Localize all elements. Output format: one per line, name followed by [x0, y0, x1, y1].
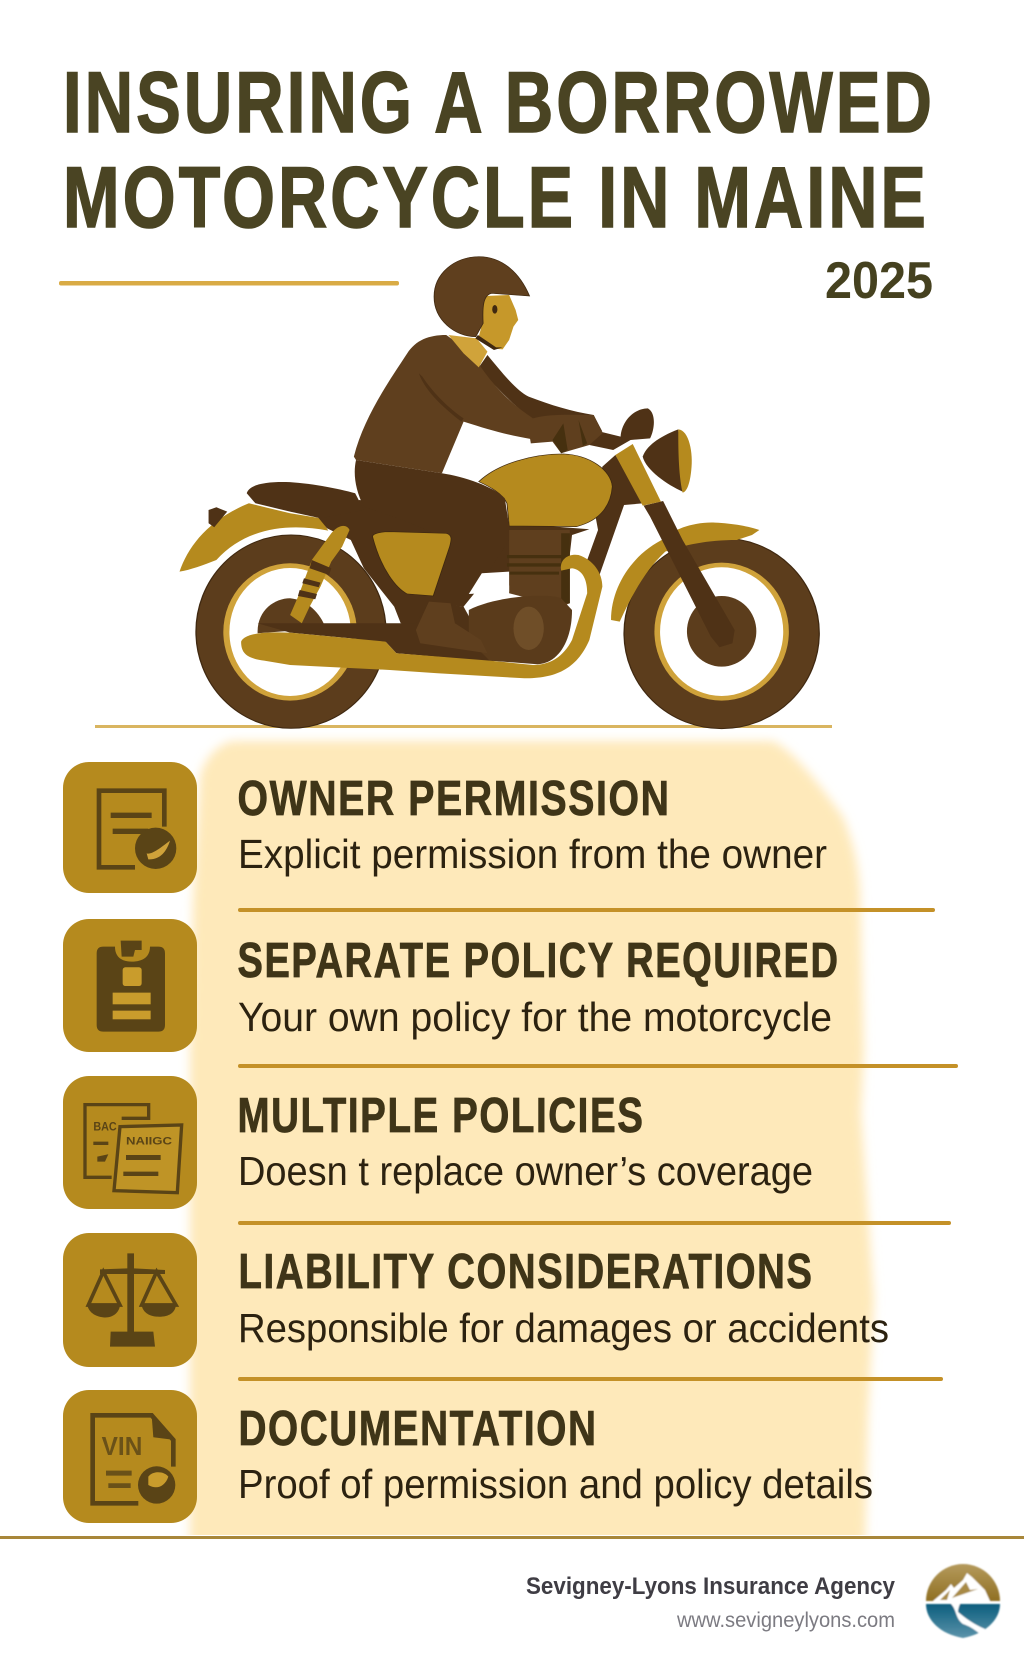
heading: SEPARATE POLICY REQUIRED [238, 934, 840, 988]
front wheel [624, 538, 819, 729]
divider 4 [238, 1377, 943, 1381]
glove [529, 415, 602, 453]
heading: LIABILITY CONSIDERATIONS [238, 1245, 814, 1299]
description: Your own policy for the motorcycle [238, 994, 832, 1040]
fuel tank [479, 454, 612, 527]
engine [469, 530, 572, 664]
icon: VIN document [63, 1390, 197, 1523]
year label: 2025 [825, 252, 933, 310]
rider trousers [355, 460, 509, 607]
headlight [643, 429, 692, 493]
ground line [95, 725, 832, 728]
rear body [316, 500, 589, 627]
icon: clipboard [63, 919, 197, 1052]
row: documentation [63, 1390, 873, 1523]
description: Explicit permission from the owner [238, 831, 827, 877]
illustration: rider on motorcycle [180, 257, 819, 729]
rear fender [180, 503, 328, 572]
collar [448, 335, 487, 367]
icon: overlapping documents [63, 1076, 197, 1209]
row: liability considerations [63, 1233, 889, 1367]
icon: VIN document: VIN [102, 1431, 142, 1461]
divider 1 [238, 908, 935, 912]
icon: balance scales [63, 1233, 197, 1367]
title [63, 55, 935, 246]
frame [587, 455, 644, 577]
description: Doesn t replace owner’s coverage [238, 1148, 813, 1194]
seat [247, 482, 364, 518]
front fender [611, 523, 759, 622]
website: www.sevigneylyons.com [676, 1609, 895, 1632]
row: separate policy required [63, 919, 840, 1052]
tail light [209, 507, 227, 527]
row: owner permission [63, 762, 827, 893]
rear shock [290, 526, 350, 623]
heading: DOCUMENTATION [238, 1402, 598, 1456]
icon: overlapping documents: BAC [93, 1120, 117, 1134]
exhaust pipe [241, 555, 602, 678]
heading: MULTIPLE POLICIES [238, 1089, 644, 1143]
icon: agency logo [926, 1564, 1000, 1638]
description: Responsible for damages or accidents [238, 1305, 889, 1351]
icon: overlapping documents: NAIIGC [126, 1136, 172, 1148]
divider 2 [238, 1064, 958, 1068]
rider boot [416, 602, 487, 653]
helmet [434, 257, 530, 337]
far arm [479, 355, 602, 440]
swingarm [258, 602, 494, 662]
upper fork [615, 444, 661, 506]
sleeve fold [419, 373, 464, 422]
row: multiple policies [63, 1076, 813, 1209]
face [475, 295, 518, 350]
agency name: Sevigney-Lyons Insurance Agency [526, 1573, 895, 1600]
mirror and handlebar [589, 408, 654, 450]
gap between leg and engine [469, 572, 509, 594]
icon: document with check [63, 762, 197, 893]
cream background panel [190, 741, 874, 1560]
heading: OWNER PERMISSION [238, 772, 670, 826]
rider torso and near arm [354, 335, 533, 473]
side panel [373, 532, 451, 596]
footer [0, 1535, 1024, 1666]
title accent rule [59, 281, 399, 286]
description: Proof of permission and policy details [238, 1461, 873, 1507]
front fork [644, 501, 735, 647]
rear wheel [196, 535, 386, 728]
divider 3 [238, 1221, 951, 1225]
